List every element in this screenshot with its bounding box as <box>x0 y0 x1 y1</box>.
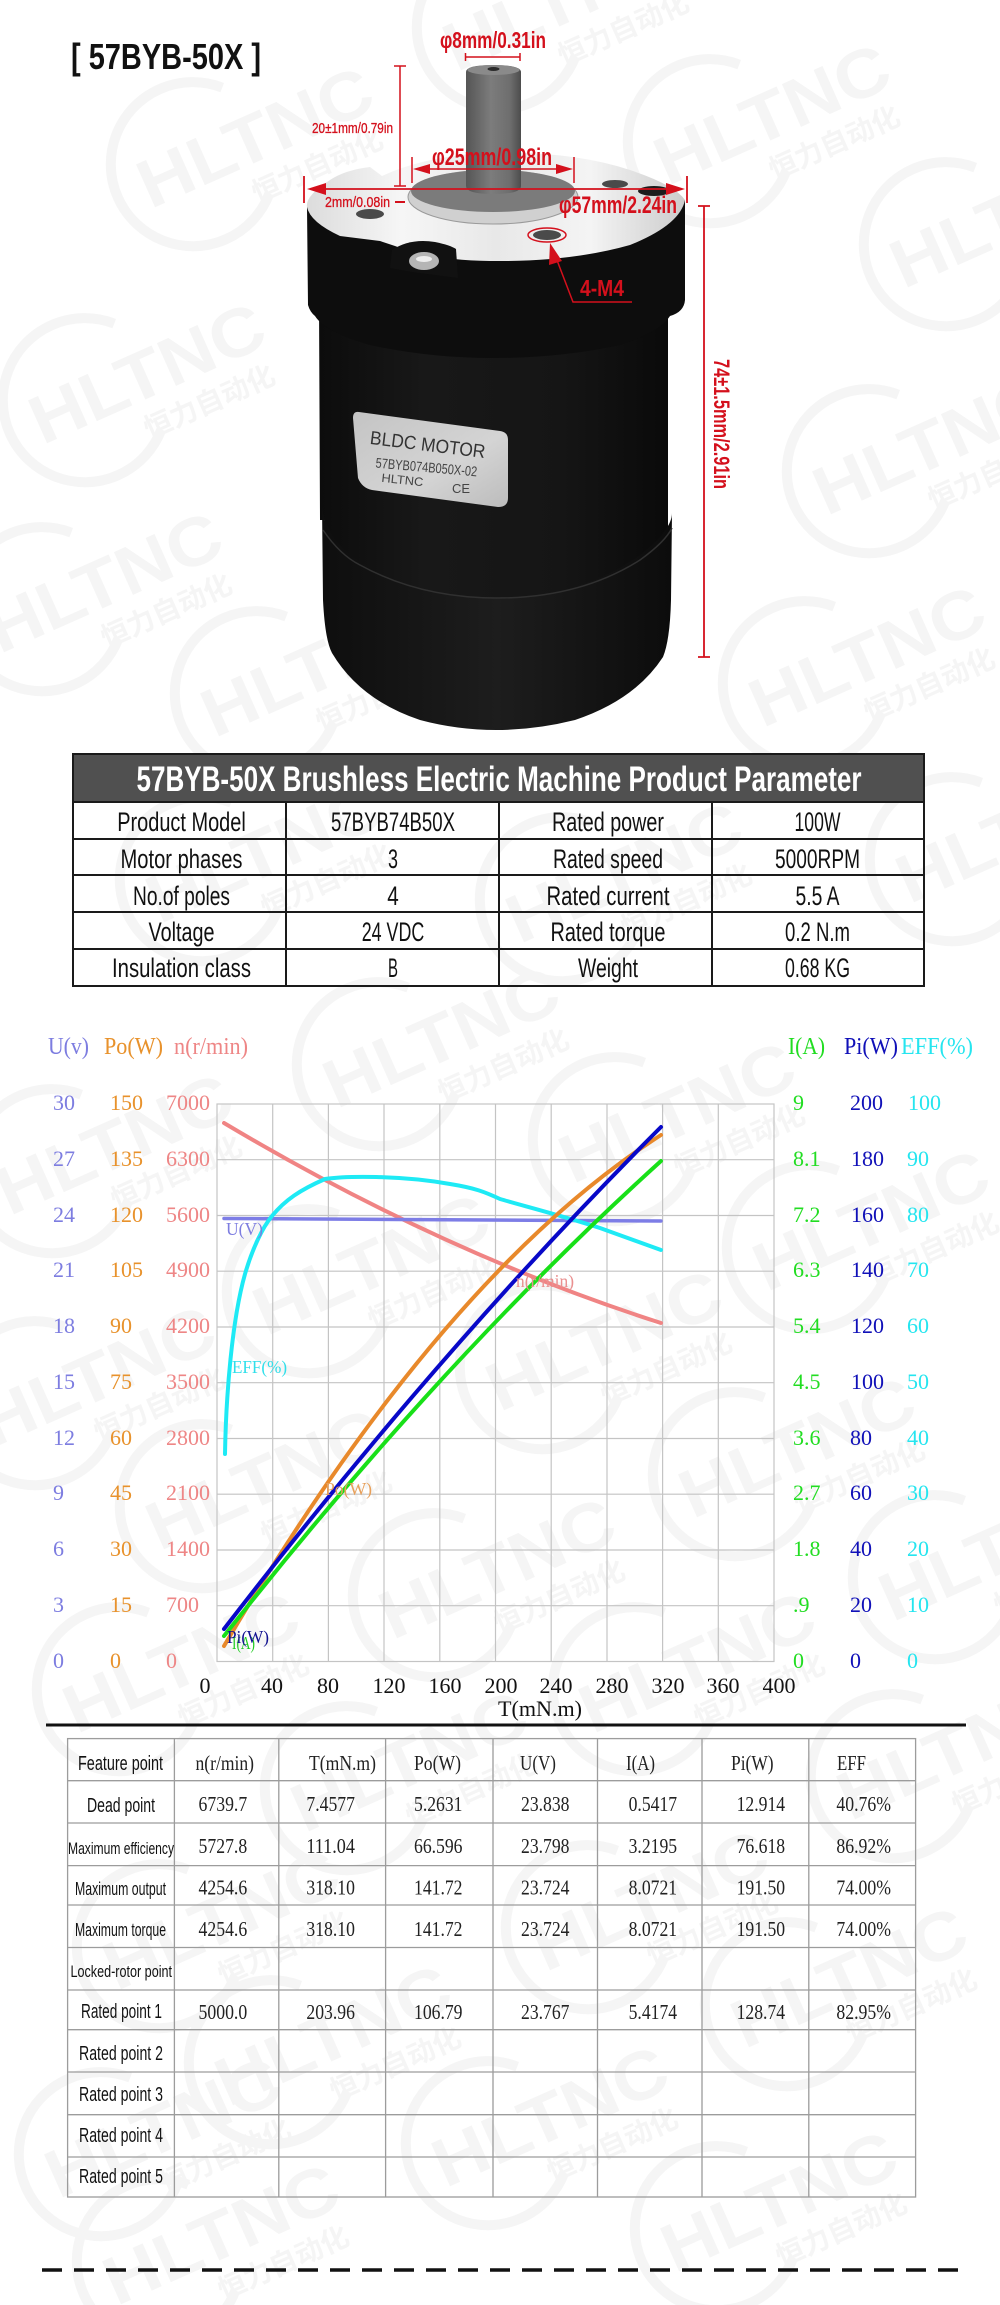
row: dead point values <box>198 1792 891 1816</box>
axis: input power ticks: 180 <box>851 1146 884 1171</box>
axis: input power ticks: 120 <box>851 1313 884 1338</box>
watermark background: HLTNC <box>643 29 902 200</box>
axis: input power ticks: 140 <box>851 1257 884 1282</box>
axis titles right <box>788 1034 973 1060</box>
axis: voltage ticks: 9 <box>53 1480 64 1505</box>
bottom dashed separator <box>42 2268 966 2272</box>
axis: current ticks: 1.8 <box>793 1536 820 1561</box>
axis: voltage ticks: 30 <box>53 1090 75 1115</box>
axis: input power ticks <box>850 1090 884 1673</box>
row: rated point 1 values: 5.4174 <box>629 2000 678 2024</box>
motor: flange housing <box>307 200 685 358</box>
curve: efficiency <box>225 1177 661 1454</box>
watermark background: 恒力自动化 <box>841 1964 982 2049</box>
axis: input power ticks: 100 <box>851 1369 884 1394</box>
row: maximum output values: 191.50 <box>737 1876 785 1900</box>
watermark background: HLTNC <box>521 1815 780 1986</box>
motor: name plate: 57BYB074B050X-02 <box>375 455 478 479</box>
axis: torque ticks: 120 <box>372 1673 406 1698</box>
curve labels: EFF(%) <box>232 1357 287 1378</box>
dimension: total length <box>698 206 734 657</box>
feature table row labels: Rated point 5 <box>79 2166 163 2188</box>
watermark background: HLTNC <box>135 767 394 938</box>
row: maximum output values: 74.00% <box>836 1876 891 1900</box>
row: maximum output values: 318.10 <box>306 1876 355 1900</box>
table row: insulation and weight: 0.68 KG <box>785 953 850 983</box>
row: rated point 1 values: 82.95% <box>836 2000 891 2024</box>
axis: speed ticks: 2800 <box>166 1425 210 1450</box>
watermark background: 恒力自动化 <box>89 1363 230 1448</box>
motor: name plate: CE <box>452 481 470 496</box>
table row: insulation and weight: B <box>388 953 398 983</box>
axis: current ticks: 9 <box>793 1090 804 1115</box>
row: maximum efficiency values: 76.618 <box>737 1834 785 1858</box>
table row: model and power: Product Model <box>117 807 246 837</box>
feature table column headers: T(mN.m) <box>309 1751 376 1775</box>
motor: middle body <box>319 300 668 610</box>
callout: 4-M4 holes: 4-M4 <box>580 275 624 301</box>
feature table column headers: n(r/min) <box>196 1751 254 1775</box>
row: dead point values: 23.838 <box>521 1792 570 1816</box>
axis: torque ticks <box>200 1673 796 1698</box>
table row: poles and current: No.of poles <box>133 881 230 911</box>
table row: poles and current: 5.5 A <box>796 881 840 911</box>
axis: output power ticks: 60 <box>110 1425 132 1450</box>
row: maximum output values: 141.72 <box>414 1876 462 1900</box>
motor: name plate <box>353 412 508 507</box>
watermark background: HLTNC <box>495 787 754 958</box>
axis: input power ticks: 0 <box>850 1648 861 1673</box>
motor: name plate: HLTNC <box>381 471 424 489</box>
watermark background: HLTNC <box>190 581 449 752</box>
watermark background: HLTNC <box>280 1676 539 1847</box>
axis titles left: Po(W) <box>104 1034 163 1060</box>
axis: input power ticks: 60 <box>850 1480 872 1505</box>
axis: efficiency ticks: 20 <box>907 1536 929 1561</box>
dimension: boss diameter: φ25mm/0.98in <box>432 144 552 171</box>
axis: input power ticks: 20 <box>850 1592 872 1617</box>
row: maximum efficiency values: 111.04 <box>306 1834 355 1858</box>
watermark background: HLTNC <box>242 1179 501 1350</box>
watermark background: 恒力自动化 <box>106 1131 247 1216</box>
watermark background: HLTNC <box>421 2031 680 2202</box>
watermark background: 恒力自动化 <box>764 101 905 186</box>
axis: current ticks: 3.6 <box>793 1425 820 1450</box>
row: maximum efficiency values: 5727.8 <box>198 1834 247 1858</box>
curve: input power Pi <box>224 1127 661 1629</box>
axis: output power ticks <box>110 1090 143 1673</box>
axis: current ticks <box>793 1090 820 1673</box>
watermark background: 恒力自动化 <box>669 1099 810 1184</box>
motor photo illustration <box>307 65 685 730</box>
row: maximum torque values: 4254.6 <box>198 1917 247 1941</box>
motor: cable screw <box>390 241 458 278</box>
axis: efficiency ticks: 100 <box>908 1090 941 1115</box>
curve: speed n <box>224 1123 661 1323</box>
motor: top aluminium face <box>307 153 685 261</box>
axis titles right: I(A) <box>788 1034 825 1060</box>
axis: efficiency ticks: 70 <box>907 1257 929 1282</box>
table row: poles and current: Rated current <box>546 881 670 911</box>
axis: efficiency ticks: 30 <box>907 1480 929 1505</box>
axis: efficiency ticks: 40 <box>907 1425 929 1450</box>
row: maximum torque values: 8.0721 <box>629 1917 677 1941</box>
motor: mounting holes <box>356 180 670 240</box>
axis: voltage ticks: 24 <box>53 1202 75 1227</box>
table row: insulation and weight: Weight <box>578 953 638 983</box>
watermark background: HLTNC <box>650 2116 909 2287</box>
feature table row labels <box>68 1753 174 2188</box>
feature table column headers <box>196 1751 866 1775</box>
row: maximum output values: 8.0721 <box>629 1876 677 1900</box>
axis: current ticks: 8.1 <box>793 1146 820 1171</box>
watermark background: 恒力自动化 <box>789 1434 930 1519</box>
section divider <box>46 1724 966 1726</box>
axis titles right: Pi(W) <box>844 1034 898 1060</box>
axis titles left: U(v) <box>48 1034 89 1060</box>
watermark background: 恒力自动化 <box>325 2022 466 2107</box>
chart grid <box>217 1104 774 1662</box>
feature table column headers: Pi(W) <box>731 1751 774 1775</box>
watermark background: 恒力自动化 <box>213 2221 354 2305</box>
axis: voltage ticks: 15 <box>53 1369 75 1394</box>
table row: poles and current <box>133 881 840 911</box>
table row: phases and speed: Motor phases <box>120 844 242 874</box>
watermark background: 恒力自动化 <box>596 1327 737 1412</box>
axis: input power ticks: 160 <box>851 1202 884 1227</box>
table row: insulation and weight: Insulation class <box>112 953 251 983</box>
axis: speed ticks: 3500 <box>166 1369 210 1394</box>
row: maximum output values: 4254.6 <box>198 1876 247 1900</box>
row: maximum torque values: 318.10 <box>306 1917 355 1941</box>
watermark background: 恒力自动化 <box>247 124 388 209</box>
watermark background: HLTNC <box>738 571 997 742</box>
dimension annotations <box>304 27 734 657</box>
feature table row labels: Maximum output <box>75 1879 166 1899</box>
axis: efficiency ticks: 60 <box>907 1313 929 1338</box>
feature table row labels: Rated point 4 <box>79 2125 163 2147</box>
feature table row labels: Rated point 1 <box>81 2001 162 2023</box>
axis: speed ticks: 4200 <box>166 1313 210 1338</box>
watermark background: HLTNC <box>135 1394 394 1565</box>
row: dead point values: 40.76% <box>836 1792 891 1816</box>
dimension: boss height: 2mm/0.08in <box>325 194 390 211</box>
feature table row labels: Maximum efficiency <box>68 1839 174 1858</box>
curve: output power Po <box>224 1135 661 1646</box>
axis: efficiency ticks: 0 <box>907 1648 918 1673</box>
row: dead point values: 5.2631 <box>414 1792 462 1816</box>
watermark background: 恒力自动化 <box>542 2103 683 2188</box>
watermark background: HLTNC <box>720 1892 979 2063</box>
row: maximum output values <box>198 1876 891 1900</box>
motor: output shaft <box>466 65 521 194</box>
row: maximum torque values <box>198 1917 891 1941</box>
watermark background: 恒力自动化 <box>642 1887 783 1972</box>
axis: torque ticks: 0 <box>200 1673 210 1698</box>
watermark background: 恒力自动化 <box>311 653 452 738</box>
watermark background: 恒力自动化 <box>173 1649 314 1734</box>
curve labels: U(V) <box>226 1219 263 1240</box>
callout: 4-M4 holes <box>528 228 632 302</box>
table row: voltage and torque: Rated torque <box>550 917 666 947</box>
axis titles left <box>48 1034 248 1060</box>
watermark background: 恒力自动化 <box>96 569 237 654</box>
watermark background: HLTNC <box>548 1027 807 1198</box>
table row: phases and speed: Rated speed <box>553 844 663 874</box>
curve labels: Po(W) <box>325 1479 372 1500</box>
table grid <box>73 754 924 986</box>
axis: torque ticks: 360 <box>706 1673 740 1698</box>
axis: input power ticks: 200 <box>850 1090 883 1115</box>
feature table row labels: Rated point 2 <box>79 2043 163 2065</box>
row: rated point 1 values: 23.767 <box>521 2000 570 2024</box>
axis: current ticks: 0 <box>793 1648 804 1673</box>
watermark background: HLTNC <box>34 2042 293 2213</box>
dimension: shaft diameter: φ8mm/0.31in <box>440 27 546 53</box>
axis: efficiency ticks: 90 <box>907 1146 929 1171</box>
parameter table <box>73 754 924 986</box>
dimension: shaft length: 20±1mm/0.79in <box>312 120 393 137</box>
watermark background: 恒力自动化 <box>489 1555 630 1640</box>
watermark background: 恒力自动化 <box>689 1649 830 1734</box>
feature point table <box>68 1739 916 2197</box>
axis: output power ticks: 150 <box>110 1090 143 1115</box>
curve labels: Pi(W) <box>227 1627 269 1648</box>
curve labels <box>226 1219 574 1654</box>
axis: output power ticks: 135 <box>110 1146 143 1171</box>
axis: voltage ticks: 21 <box>53 1257 75 1282</box>
watermark background: HLTNC <box>126 52 385 223</box>
row: maximum torque values: 23.724 <box>521 1917 570 1941</box>
axis: voltage ticks: 27 <box>53 1146 75 1171</box>
table row: poles and current: 4 <box>387 881 399 911</box>
axis: current ticks: 5.4 <box>793 1313 820 1338</box>
axis: output power ticks: 75 <box>110 1369 132 1394</box>
row: maximum efficiency values <box>198 1834 891 1858</box>
axis: speed ticks: 5600 <box>166 1202 210 1227</box>
row: rated point 1 values: 128.74 <box>737 2000 786 2024</box>
feature table column headers: U(V) <box>520 1751 556 1775</box>
axis: current ticks: 7.2 <box>793 1202 820 1227</box>
axis: voltage ticks <box>53 1090 75 1673</box>
axis: speed ticks: 1400 <box>166 1536 210 1561</box>
table row: phases and speed <box>120 844 860 874</box>
row: dead point values: 0.5417 <box>629 1792 677 1816</box>
watermark background: 恒力自动化 <box>155 2114 296 2199</box>
axis: speed ticks <box>166 1090 210 1673</box>
motor: face ring <box>408 170 578 224</box>
feature table row labels: Feature point <box>78 1753 163 1775</box>
axis: torque ticks: 400 <box>762 1673 796 1698</box>
table row: voltage and torque <box>148 917 850 947</box>
axis: voltage ticks: 3 <box>53 1592 64 1617</box>
axis: torque ticks: 240 <box>540 1673 572 1698</box>
watermark background: HLTNC <box>92 1834 351 2005</box>
table row: voltage and torque: Voltage <box>148 917 214 947</box>
row: rated point 1 values: 203.96 <box>306 2000 355 2024</box>
watermark background: 恒力自动化 <box>139 360 280 445</box>
axis: current ticks: 4.5 <box>793 1369 820 1394</box>
row: dead point values: 6739.7 <box>198 1792 247 1816</box>
axis: current ticks: .9 <box>793 1592 810 1617</box>
feature table grid <box>68 1739 916 2197</box>
curve labels: n(r/min) <box>516 1271 574 1292</box>
watermark background: 恒力自动化 <box>256 1466 397 1551</box>
table row: phases and speed: 5000RPM <box>775 844 860 874</box>
axis: efficiency ticks: 50 <box>907 1369 929 1394</box>
axis: input power ticks: 40 <box>850 1536 872 1561</box>
watermark background: HLTNC <box>568 1577 827 1748</box>
axis: speed ticks: 2100 <box>166 1480 210 1505</box>
watermark background: 恒力自动化 <box>363 1251 504 1336</box>
feature table column headers: I(A) <box>626 1751 655 1775</box>
row: rated point 1 values <box>198 2000 891 2024</box>
table row: phases and speed: 3 <box>388 844 398 874</box>
axis: voltage ticks: 6 <box>53 1536 64 1561</box>
watermark background: HLTNC <box>18 288 277 459</box>
axis: output power ticks: 0 <box>110 1648 121 1673</box>
axis: speed ticks: 6300 <box>166 1146 210 1171</box>
axis: speed ticks: 700 <box>166 1592 199 1617</box>
row: rated point 1 values: 5000.0 <box>198 2000 247 2024</box>
axis: efficiency ticks: 80 <box>907 1202 929 1227</box>
axis: efficiency ticks <box>907 1090 941 1673</box>
watermark background: HLTNC <box>204 1950 463 2121</box>
axis: output power ticks: 120 <box>110 1202 143 1227</box>
axis: torque ticks: 40 <box>261 1673 283 1698</box>
row: maximum efficiency values: 86.92% <box>836 1834 891 1858</box>
motor: bottom cup <box>322 503 672 730</box>
curve: voltage U <box>224 1218 661 1221</box>
row: maximum torque values: 191.50 <box>737 1917 785 1941</box>
watermark background: HLTNC <box>668 1362 927 1533</box>
table row: voltage and torque: 24 VDC <box>362 917 424 947</box>
table row: model and power: 100W <box>794 807 841 837</box>
motor: name plate: BLDC MOTOR <box>369 428 487 463</box>
watermark background: 恒力自动化 <box>616 859 757 944</box>
axis: output power ticks: 105 <box>110 1257 143 1282</box>
table row: model and power <box>117 807 841 837</box>
row: dead point values: 12.914 <box>737 1792 786 1816</box>
axis: torque ticks: 80 <box>317 1673 339 1698</box>
watermark background: HLTNC <box>312 952 571 1123</box>
dimension: boss diameter <box>412 144 574 183</box>
table row: model and power: 57BYB74B50X <box>331 807 455 837</box>
title: model name: [ 57BYB-50X ] <box>71 36 261 77</box>
dimension: body diameter: φ57mm/2.24in <box>559 192 677 219</box>
watermark background: 恒力自动化 <box>256 839 397 924</box>
axis: output power ticks: 30 <box>110 1536 132 1561</box>
axis: voltage ticks: 0 <box>53 1648 64 1673</box>
feature table row labels: Dead point <box>87 1795 155 1817</box>
watermark background: 恒力自动化 <box>401 1748 542 1833</box>
table row: voltage and torque: 0.2 N.m <box>785 917 850 947</box>
axis: speed ticks: 0 <box>166 1648 177 1673</box>
motor: cup rim <box>323 528 672 598</box>
axis title: torque: T(mN.m) <box>498 1696 582 1721</box>
watermark background: 恒力自动化 <box>863 1207 1000 1292</box>
dimension: total length: 74±1.5mm/2.91in <box>709 359 734 489</box>
watermark background: 恒力自动化 <box>859 643 1000 728</box>
axis titles left: n(r/min) <box>174 1034 248 1060</box>
feature table column headers: EFF <box>837 1751 866 1775</box>
performance chart <box>48 1034 973 1721</box>
feature table column headers: Po(W) <box>414 1751 461 1775</box>
axis: torque ticks: 320 <box>652 1673 684 1698</box>
row: maximum torque values: 141.72 <box>414 1917 462 1941</box>
curve labels: I(A) <box>232 1633 255 1654</box>
axis: torque ticks: 200 <box>484 1673 518 1698</box>
watermark background: HLTNC <box>368 1483 627 1654</box>
axis: current ticks: 6.3 <box>793 1257 820 1282</box>
watermark background: 恒力自动化 <box>433 1024 574 1109</box>
axis: output power ticks: 90 <box>110 1313 132 1338</box>
axis: speed ticks: 4900 <box>166 1257 210 1282</box>
row: maximum torque values: 74.00% <box>836 1917 891 1941</box>
table row: model and power: Rated power <box>552 807 664 837</box>
axis: efficiency ticks: 10 <box>907 1592 929 1617</box>
axis: speed ticks: 7000 <box>166 1090 210 1115</box>
axis: torque ticks: 160 <box>428 1673 462 1698</box>
axis: input power ticks: 80 <box>850 1425 872 1450</box>
watermark background: HLTNC <box>742 1135 1000 1306</box>
watermark background: HLTNC <box>475 1255 734 1426</box>
motor: raised disc <box>411 170 575 212</box>
dimension: shaft diameter <box>440 27 546 61</box>
axis: output power ticks: 45 <box>110 1480 132 1505</box>
row: dead point values: 7.4577 <box>306 1792 355 1816</box>
axis: voltage ticks: 18 <box>53 1313 75 1338</box>
watermark background: HLTNC <box>52 1577 311 1748</box>
feature table row labels: Rated point 3 <box>79 2084 163 2106</box>
row: rated point 1 values: 106.79 <box>414 2000 462 2024</box>
row: maximum output values: 23.724 <box>521 1876 570 1900</box>
row: maximum efficiency values: 3.2195 <box>629 1834 677 1858</box>
axis: current ticks: 2.7 <box>793 1480 820 1505</box>
table row: insulation and weight <box>112 953 850 983</box>
row: maximum efficiency values: 23.798 <box>521 1834 570 1858</box>
feature table row labels: Maximum torque <box>75 1920 166 1940</box>
axis: voltage ticks: 12 <box>53 1425 75 1450</box>
dimension: body diameter <box>304 176 687 219</box>
curve: current I <box>224 1161 661 1636</box>
axis: torque ticks: 280 <box>596 1673 628 1698</box>
watermark background: 恒力自动化 <box>771 2188 912 2273</box>
axis titles right: EFF(%) <box>901 1034 973 1060</box>
row: maximum efficiency values: 66.596 <box>414 1834 462 1858</box>
watermark background: 恒力自动化 <box>213 1906 354 1991</box>
axis: output power ticks: 15 <box>110 1592 132 1617</box>
dimension: shaft length <box>312 66 406 186</box>
feature table row labels: Locked-rotor point <box>70 1962 172 1981</box>
